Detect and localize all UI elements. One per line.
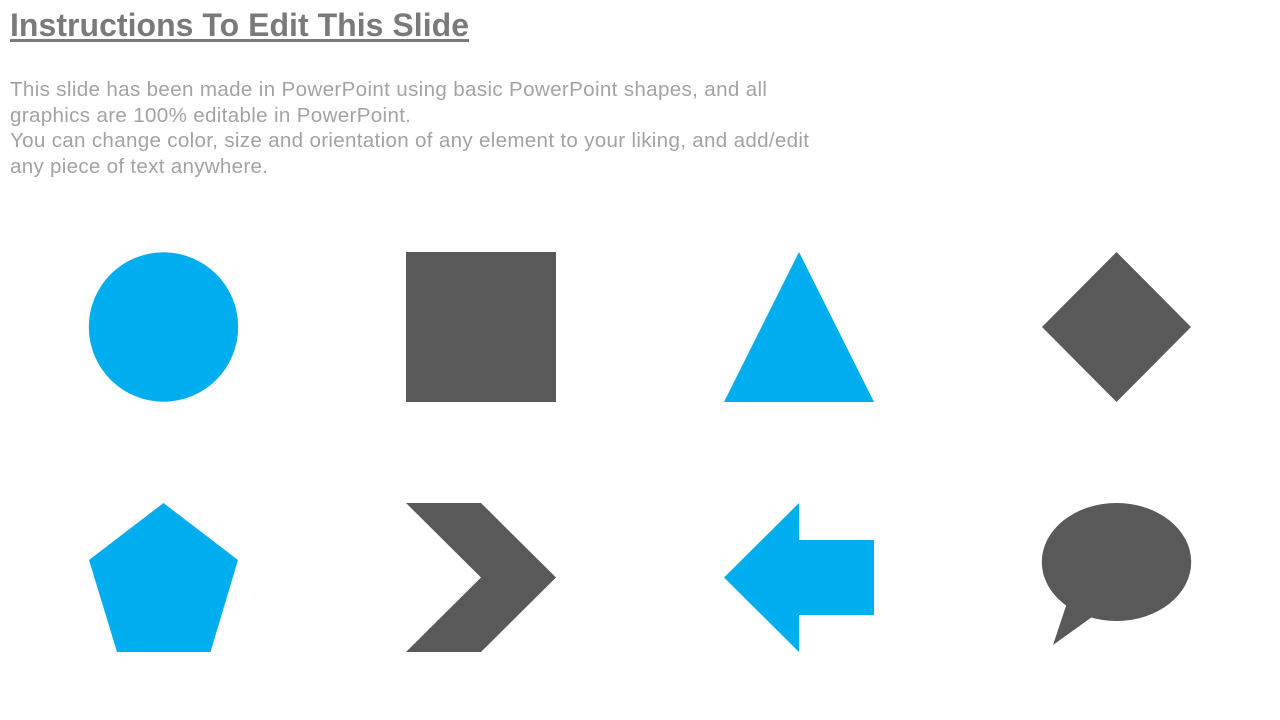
- icon: diamond: [1042, 252, 1191, 402]
- text block: instructions: This slide has been made in PowerPoint using basic PowerPoint shapes, and all: [10, 78, 767, 101]
- icon: speech bubble: [1042, 503, 1191, 645]
- icon: square: [406, 252, 556, 402]
- icon: left arrow: [724, 503, 874, 652]
- icon: circle: [89, 252, 238, 402]
- text block: instructions: You can change color, size and orientation of any element to your liking, and add/edit: [10, 129, 809, 152]
- text block: instructions: [10, 78, 809, 178]
- icon: chevron: [406, 503, 556, 652]
- icon: triangle: [724, 252, 874, 402]
- icon: pentagon: [89, 503, 238, 652]
- title: Instructions To Edit This Slide: [10, 7, 469, 43]
- text block: instructions: any piece of text anywhere.: [10, 155, 268, 178]
- text block: instructions: graphics are 100% editable in PowerPoint.: [10, 104, 411, 127]
